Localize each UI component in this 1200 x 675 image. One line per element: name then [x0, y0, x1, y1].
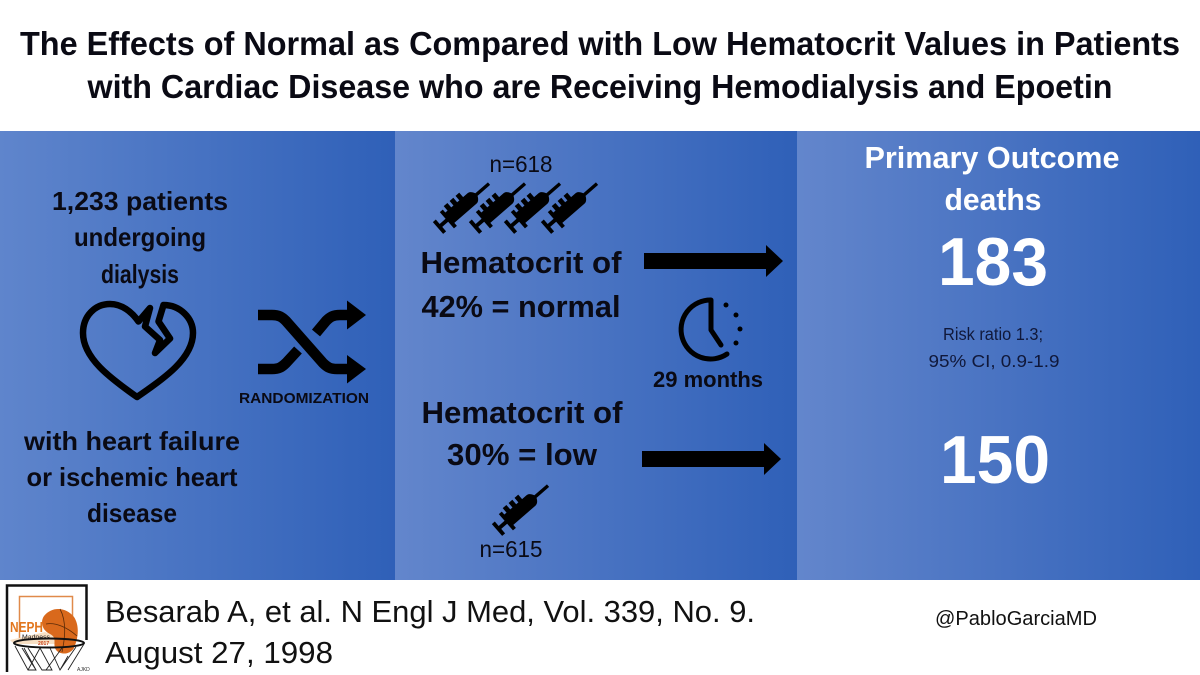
value: normal arm deaths: 183 — [938, 224, 1048, 300]
logo: NEPH Madness: 2017 — [38, 641, 49, 647]
icon: four syringes — [430, 174, 604, 236]
value: low arm deaths: 150 — [940, 422, 1050, 498]
population text bottom: with heart failure — [23, 426, 240, 456]
risk ratio — [928, 324, 1060, 371]
icon: randomization arrows — [258, 300, 366, 384]
population text top: undergoing — [74, 222, 206, 252]
population text top — [52, 186, 228, 289]
title: with Cardiac Disease who are Receiving Hemodialysis and Epoetin — [87, 68, 1112, 105]
population text bottom: disease — [87, 498, 177, 528]
icon: broken heart — [83, 304, 193, 397]
outcome heading — [864, 140, 1120, 217]
low hematocrit arm — [422, 395, 623, 472]
title: The Effects of Normal as Compared with Low Hematocrit Values in Patients — [20, 25, 1180, 62]
risk ratio: 95% CI, 0.9-1.9 — [928, 351, 1060, 371]
randomization label: RANDOMIZATION — [239, 390, 369, 407]
citation — [105, 594, 755, 670]
icon: clock — [681, 300, 742, 359]
normal hematocrit arm — [420, 245, 622, 324]
outcome heading: Primary Outcome — [864, 140, 1120, 175]
citation: August 27, 1998 — [105, 635, 333, 670]
normal hematocrit arm: Hematocrit of — [420, 245, 622, 280]
n=615: n=615 — [480, 536, 542, 562]
author handle: @PabloGarciaMD — [935, 608, 1097, 630]
panel: primary outcome — [797, 131, 1200, 580]
low hematocrit arm: Hematocrit of — [422, 395, 623, 430]
population text top: dialysis — [101, 259, 179, 289]
outcome heading: deaths — [944, 182, 1042, 217]
panel: population — [0, 131, 395, 580]
population text bottom — [23, 426, 240, 528]
n=618: n=618 — [490, 151, 552, 177]
normal hematocrit arm: 42% = normal — [422, 289, 620, 324]
logo: NEPH Madness: AJKD — [77, 667, 90, 673]
icon: one syringe — [489, 476, 555, 538]
logo: NEPH Madness: Madness — [22, 634, 51, 641]
arrow: low arm — [642, 443, 781, 475]
population text top: 1,233 patients — [52, 186, 228, 216]
panel: treatment arms — [395, 131, 797, 580]
arrow: normal arm — [644, 245, 783, 277]
population text bottom: or ischemic heart — [26, 462, 238, 492]
citation: Besarab A, et al. N Engl J Med, Vol. 339, No. 9. — [105, 594, 755, 629]
low hematocrit arm: 30% = low — [447, 437, 598, 472]
title — [20, 25, 1180, 105]
duration label: 29 months — [653, 367, 763, 392]
logo: NEPH Madness — [7, 586, 90, 673]
risk ratio: Risk ratio 1.3; — [943, 324, 1043, 344]
logo: NEPH Madness: NEPH — [10, 620, 43, 636]
